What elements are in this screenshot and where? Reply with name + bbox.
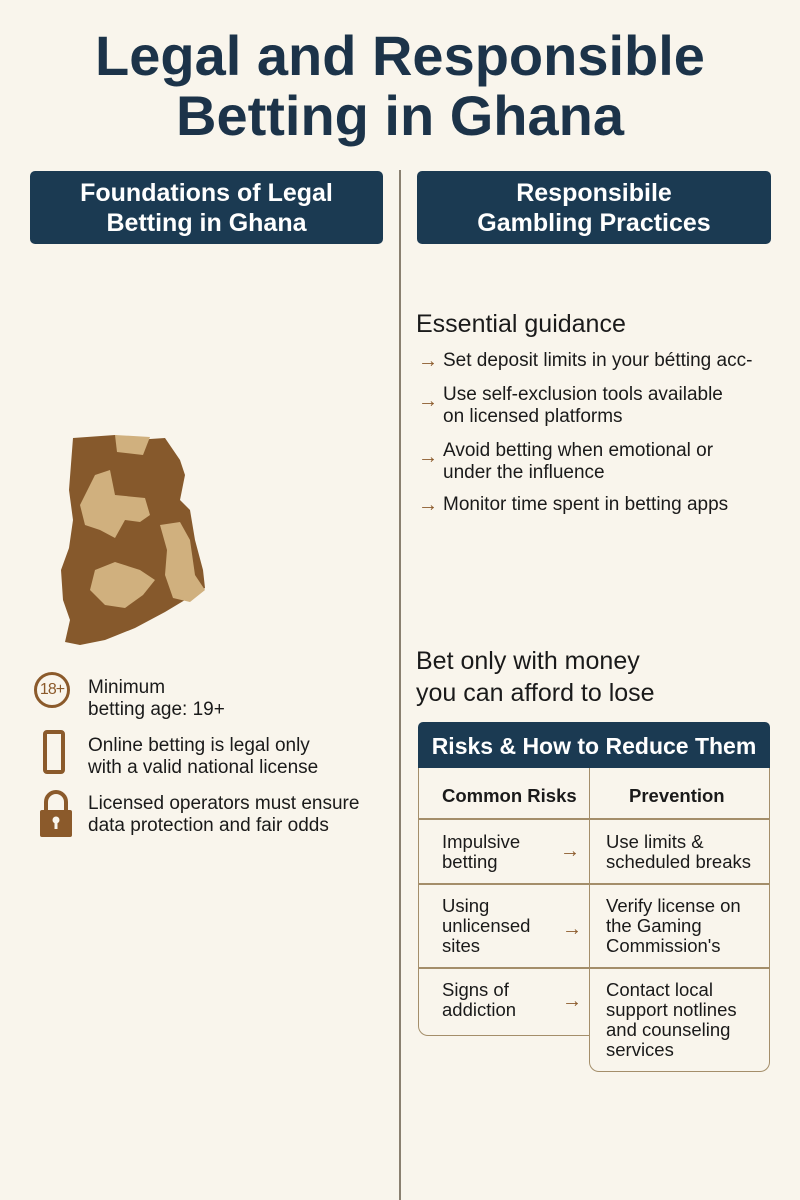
- risks table: Verify license on: [606, 895, 741, 916]
- guidance list: under the influence: [443, 462, 605, 483]
- risks table: Common Risks: [442, 785, 577, 806]
- risks table: services: [606, 1039, 674, 1060]
- guidance list: Use self-exclusion tools available: [443, 384, 723, 405]
- risks table: [418, 722, 770, 1072]
- guidance list: →: [418, 446, 438, 468]
- risks table: Contact local: [606, 979, 713, 1000]
- icon: lock: [40, 790, 72, 837]
- title: [95, 24, 705, 147]
- guidance list: →: [418, 350, 438, 372]
- item: online license: [43, 730, 318, 778]
- risks table: support notlines: [606, 999, 737, 1020]
- risks table: Risks & How to Reduce Them: [432, 733, 756, 759]
- risks table: and counseling: [606, 1019, 730, 1040]
- item: minimum age: [34, 672, 225, 720]
- risks table: the Gaming: [606, 915, 702, 936]
- risks table: addiction: [442, 999, 516, 1020]
- item: data protection: Licensed operators must ensure: [88, 793, 359, 814]
- guidance list: Monitor time spent in betting apps: [443, 494, 728, 515]
- guidance list: Avoid betting when emotional or: [443, 440, 713, 461]
- risks table: sites: [442, 935, 480, 956]
- map of Ghana: [61, 435, 205, 645]
- risks table: betting: [442, 851, 498, 872]
- title: Betting in Ghana: [176, 84, 624, 147]
- guidance list: →: [418, 390, 438, 412]
- item: minimum age: Minimum: [88, 677, 165, 698]
- header: foundations: [30, 171, 383, 244]
- header: responsible: Responsibile: [516, 179, 672, 207]
- heading: essential guidance: Essential guidance: [416, 310, 626, 338]
- risks table: Impulsive: [442, 831, 520, 852]
- icon: phone: [43, 730, 65, 774]
- risks table: Using: [442, 895, 489, 916]
- callout: afford to lose: you can afford to lose: [416, 679, 655, 707]
- risks table: →: [562, 990, 582, 1012]
- risks table: →: [562, 918, 582, 940]
- callout: afford to lose: Bet only with money: [416, 647, 640, 675]
- callout: afford to lose: [416, 647, 655, 707]
- risks table: Use limits &: [606, 831, 704, 852]
- icon: 18+: [34, 672, 70, 708]
- item: data protection: data protection and fair odds: [88, 815, 329, 836]
- header: foundations: Foundations of Legal: [80, 179, 333, 207]
- guidance list: →: [418, 494, 438, 516]
- item: online license: Online betting is legal only: [88, 735, 310, 756]
- guidance list: [418, 350, 752, 516]
- risks table: Commission's: [606, 935, 721, 956]
- guidance list: Set deposit limits in your bétting acc-: [443, 350, 752, 371]
- item: minimum age: betting age: 19+: [88, 699, 225, 720]
- risks table: →: [560, 840, 580, 862]
- header: responsible: Gambling Practices: [477, 209, 711, 237]
- header: responsible: [417, 171, 771, 244]
- risks table: Prevention: [629, 785, 725, 806]
- risks table: unlicensed: [442, 915, 530, 936]
- item: online license: with a valid national license: [88, 757, 318, 778]
- header: foundations: Betting in Ghana: [106, 209, 306, 237]
- risks table: scheduled breaks: [606, 851, 751, 872]
- item: data protection: [40, 790, 359, 837]
- title: Legal and Responsible: [95, 24, 705, 87]
- guidance list: on licensed platforms: [443, 406, 623, 427]
- risks table: Signs of: [442, 979, 509, 1000]
- icon: 18+: 18+: [40, 681, 64, 698]
